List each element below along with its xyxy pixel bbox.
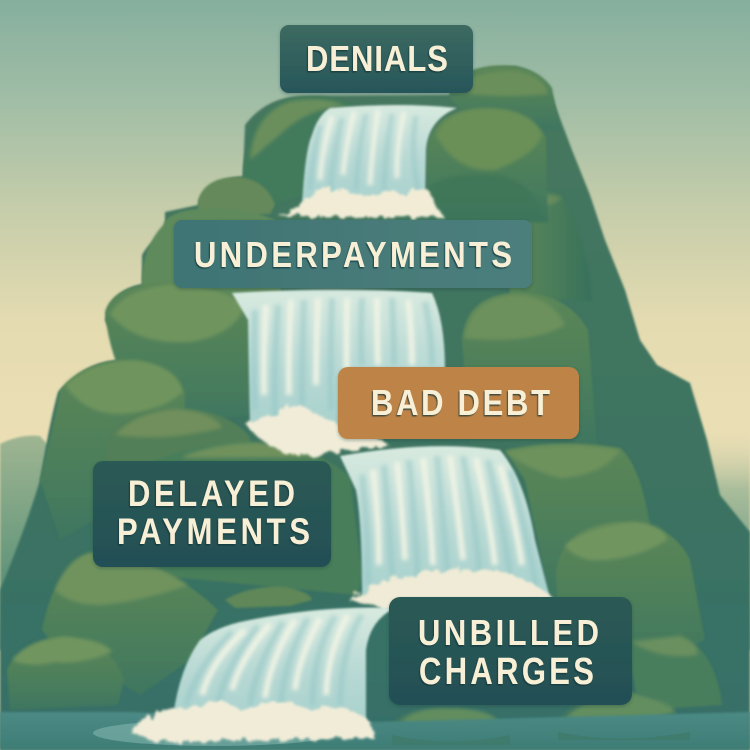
rock: right below bad debt xyxy=(505,443,650,600)
label: bad debt xyxy=(338,367,579,439)
label: unbilled charges: CHARGES xyxy=(419,651,594,693)
rock: top right xyxy=(450,65,560,130)
waterfall 2 xyxy=(232,290,445,456)
rock reflections xyxy=(392,732,690,745)
rock: shoulder above delayed label xyxy=(100,442,362,595)
foam xyxy=(247,405,390,456)
label: delayed payments: PAYMENTS xyxy=(117,511,310,553)
rock: large left upper xyxy=(105,282,250,425)
rock: right of first fall xyxy=(426,108,548,222)
label: bad debt: BAD DEBT xyxy=(371,383,550,424)
foam xyxy=(130,700,374,742)
rock: foreground center xyxy=(388,708,512,742)
label: denials xyxy=(280,25,473,93)
waterfall 4 xyxy=(172,608,395,725)
rock: lower right xyxy=(625,634,722,710)
waterfall 1 xyxy=(280,105,457,217)
rock: left large xyxy=(40,360,185,540)
label: denials: DENIALS xyxy=(306,40,448,80)
label: delayed payments xyxy=(93,461,331,567)
rock: right center xyxy=(462,293,597,445)
rock: left of first fall xyxy=(243,96,352,205)
label: delayed payments: DELAYED xyxy=(128,473,295,515)
rock: small ledge lower xyxy=(225,587,312,608)
label: underpayments xyxy=(174,220,532,288)
label: unbilled charges: UNBILLED xyxy=(418,613,599,654)
rock: large lower left xyxy=(42,553,218,695)
rock: foreground right xyxy=(555,690,690,741)
foam xyxy=(350,570,555,612)
distant hills xyxy=(0,420,750,650)
pond xyxy=(0,700,750,750)
water ripple xyxy=(93,720,337,746)
foam xyxy=(280,189,443,217)
rock: upper right ridge xyxy=(508,192,592,300)
rock: small ledge xyxy=(198,177,275,214)
label: underpayments: UNDERPAYMENTS xyxy=(194,235,512,276)
rock: lower left xyxy=(7,636,124,710)
rock: mid left xyxy=(107,408,250,475)
label: unbilled charges xyxy=(389,597,632,705)
waterfall 3 xyxy=(340,446,555,612)
rock: right boulder xyxy=(556,522,705,665)
rock: behind underpayments xyxy=(142,208,285,300)
